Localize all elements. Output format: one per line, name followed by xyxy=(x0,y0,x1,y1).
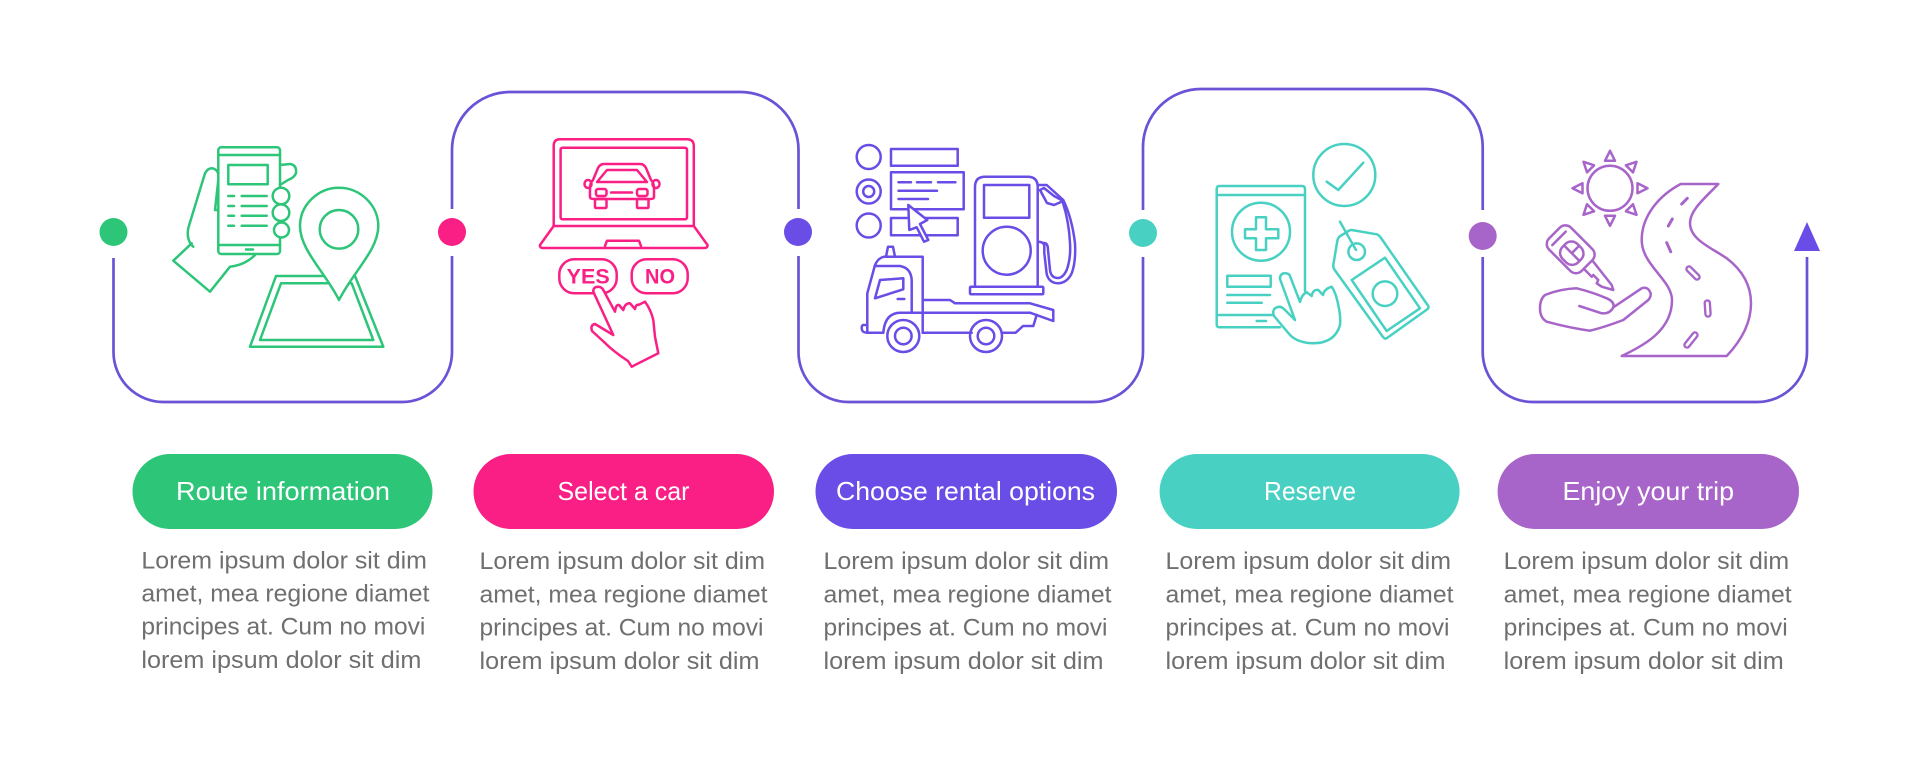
step dot: pink xyxy=(438,218,466,246)
label pill: select a car: Select a car xyxy=(558,476,690,506)
fuel pump xyxy=(970,177,1075,294)
step dot: violet xyxy=(1469,222,1497,250)
step dot: teal xyxy=(1129,219,1157,247)
text block: route information: amet, mea regione diamet xyxy=(141,581,430,608)
text block: enjoy your trip: amet, mea regione diamet xyxy=(1504,582,1792,608)
yes button xyxy=(559,259,617,293)
text block: reserve: principes at. Cum no movi xyxy=(1166,614,1450,642)
text block: reserve xyxy=(1166,548,1454,675)
text block: choose rental options: Lorem ipsum dolor sit dim xyxy=(824,548,1109,575)
step dot: green xyxy=(100,218,128,246)
text block: reserve: Lorem ipsum dolor sit dim xyxy=(1166,548,1451,575)
pointing hand xyxy=(591,287,658,367)
label pill: reserve: Reserve xyxy=(1264,476,1356,506)
process timeline path xyxy=(114,89,1807,402)
label pill: enjoy your trip: Enjoy your trip xyxy=(1562,476,1734,506)
icon: reserve xyxy=(1217,144,1428,343)
tow truck xyxy=(862,247,1053,352)
text block: enjoy your trip: Lorem ipsum dolor sit dim xyxy=(1504,548,1789,575)
text block: enjoy your trip: principes at. Cum no movi xyxy=(1504,614,1788,642)
text block: choose rental options: principes at. Cum no movi xyxy=(824,614,1108,642)
label pill: reserve xyxy=(1160,454,1460,529)
open hand xyxy=(1540,288,1651,331)
text block: select a car: Lorem ipsum dolor sit dim xyxy=(480,548,765,575)
step dot: purple xyxy=(784,218,812,246)
pointing hand xyxy=(1273,273,1340,343)
icon: route information xyxy=(173,147,383,347)
icon: enjoy your trip xyxy=(1540,151,1751,356)
label pill: enjoy your trip xyxy=(1498,454,1799,529)
label pill: route information xyxy=(132,454,432,529)
text block: choose rental options xyxy=(824,548,1112,675)
winding road xyxy=(1622,184,1751,356)
text block: route information: principes at. Cum no movi xyxy=(141,614,425,640)
no button: NO xyxy=(645,265,675,288)
label pill: choose rental options xyxy=(816,454,1117,529)
text block: route information: Lorem ipsum dolor sit dim xyxy=(141,547,427,574)
text block: enjoy your trip xyxy=(1504,548,1792,675)
text block: enjoy your trip: lorem ipsum dolor sit dim xyxy=(1504,648,1784,675)
label pill: choose rental options: Choose rental options xyxy=(836,476,1095,506)
text block: choose rental options: lorem ipsum dolor sit dim xyxy=(824,648,1104,675)
car key xyxy=(1543,222,1613,290)
text block: reserve: amet, mea regione diamet xyxy=(1166,582,1454,608)
text block: route information: lorem ipsum dolor sit dim xyxy=(141,647,421,674)
yes button: YES xyxy=(567,265,610,288)
text block: select a car: principes at. Cum no movi xyxy=(480,614,764,642)
icon: select a car xyxy=(540,139,708,367)
text block: choose rental options: amet, mea regione diamet xyxy=(824,582,1112,608)
car on screen xyxy=(584,164,660,208)
no button xyxy=(632,259,688,293)
price tag xyxy=(1333,222,1428,339)
arrow head xyxy=(1794,222,1820,251)
text block: select a car: lorem ipsum dolor sit dim xyxy=(480,648,760,675)
text block: select a car: amet, mea regione diamet xyxy=(480,582,768,608)
text block: route information xyxy=(141,547,430,674)
sun xyxy=(1572,151,1648,226)
icon: choose rental options xyxy=(857,145,1075,352)
label pill: route information: Route information xyxy=(176,476,390,506)
text block: select a car xyxy=(480,548,768,675)
label pill: select a car xyxy=(474,454,774,529)
text block: reserve: lorem ipsum dolor sit dim xyxy=(1166,648,1446,675)
